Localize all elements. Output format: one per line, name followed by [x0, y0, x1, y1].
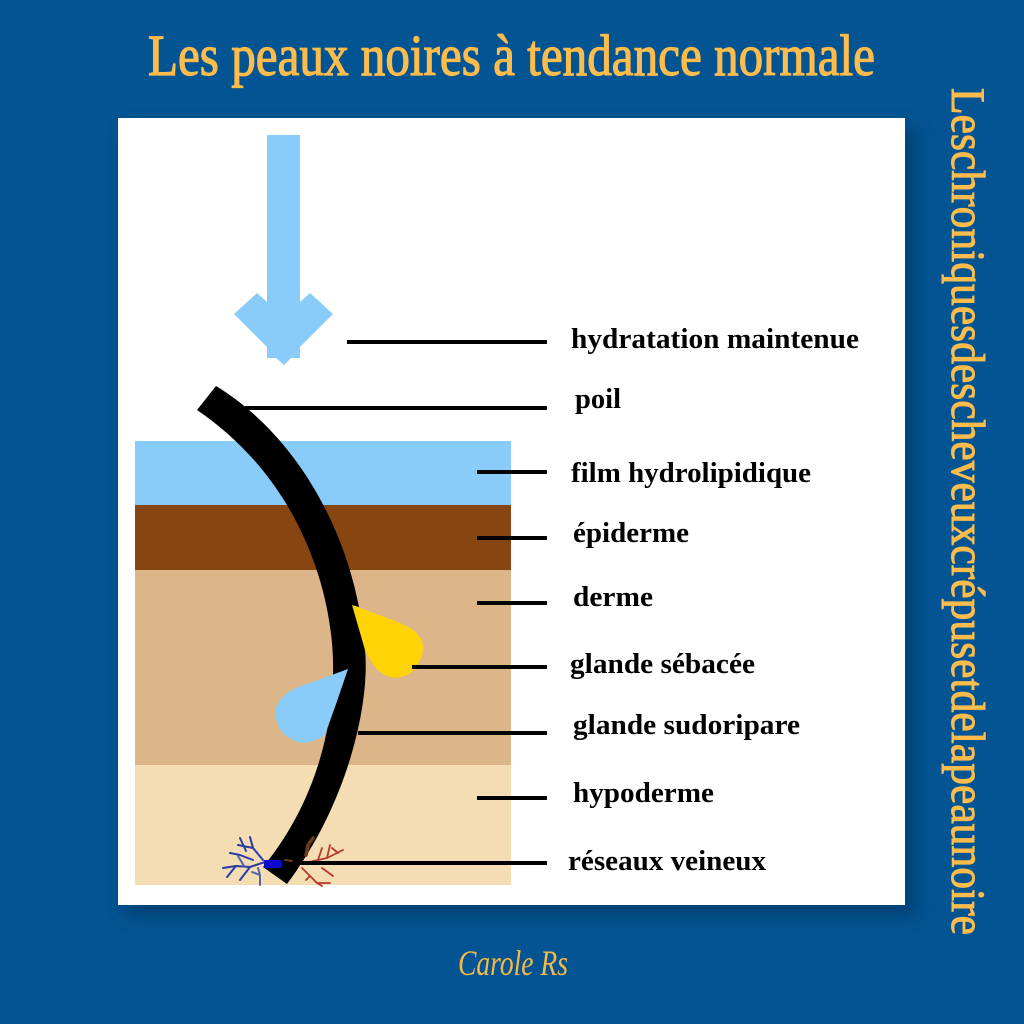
vertical side title: Leschroniquesdescheveuxcrépusetdelapeaunoire	[941, 88, 994, 935]
icon: sweat gland	[275, 669, 348, 743]
icon: sebaceous gland	[352, 605, 423, 678]
label: glande sudoripare: glande sudoripare	[573, 709, 800, 741]
icon: red arterial network	[285, 838, 343, 886]
label: glande sébacée: glande sébacée	[570, 648, 755, 680]
layer: épiderme	[135, 505, 511, 570]
label: hypoderme: hypoderme	[573, 777, 714, 809]
leader lines	[245, 342, 547, 863]
vein root	[264, 860, 282, 868]
label: derme: derme	[573, 581, 653, 613]
panel shadow	[126, 128, 916, 916]
label: poil: poil	[575, 383, 621, 415]
layer: hypoderme	[135, 765, 511, 885]
signature: Carole Rs	[458, 943, 568, 983]
white diagram panel	[118, 118, 905, 905]
layer: derme	[135, 570, 511, 765]
layer: film hydrolipidique	[135, 441, 511, 505]
hair	[197, 386, 366, 884]
skin layers	[135, 441, 511, 885]
label: réseaux veineux: réseaux veineux	[568, 845, 766, 877]
label: épiderme: épiderme	[573, 517, 689, 549]
label: hydratation: hydratation maintenue	[571, 323, 859, 355]
icon: blue venous network	[223, 837, 282, 885]
labels	[568, 323, 859, 877]
label: film: film hydrolipidique	[571, 457, 811, 489]
title: Les peaux noires à tendance normale	[148, 23, 875, 88]
arrow: hydration	[234, 135, 333, 365]
